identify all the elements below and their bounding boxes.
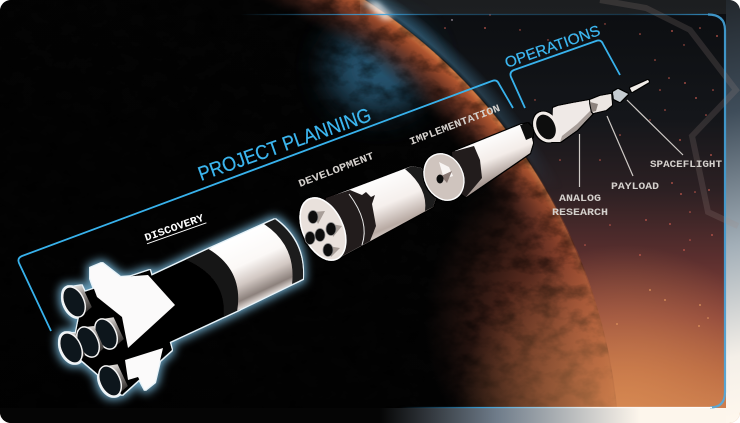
background: bottom horizon glow <box>464 258 726 408</box>
leader line: payload <box>607 116 633 176</box>
lower fin <box>125 348 163 390</box>
frame: bottom line <box>400 406 712 408</box>
engine nozzle 4 <box>94 317 124 350</box>
frame: outer rim bottom <box>0 408 726 423</box>
third stage body <box>455 124 533 197</box>
label: analog research: ANALOG <box>559 193 601 205</box>
large fin <box>90 263 175 348</box>
rocket stage: analog research module <box>530 100 593 145</box>
rocket stage: development section <box>299 166 436 261</box>
heading: project planning: PROJECT PLANNING <box>195 104 374 186</box>
label: implementation: IMPLEMENTATION <box>408 103 502 149</box>
third stage open face <box>417 147 471 207</box>
label: development: DEVELOPMENT <box>297 151 376 191</box>
background: hexagon outline <box>600 0 738 226</box>
module shadow <box>560 109 593 142</box>
second stage band line <box>349 194 364 245</box>
label: discovery: DISCOVERY <box>143 213 206 245</box>
background: planet atmosphere glow <box>366 0 541 172</box>
rocket stage: spaceflight tip <box>630 80 649 92</box>
leader line: analog research <box>578 134 580 187</box>
heading: operations: OPERATIONS <box>503 22 603 72</box>
first stage base mass <box>72 270 172 395</box>
module mouth <box>530 109 562 145</box>
third stage rear collar <box>520 123 533 140</box>
second stage body <box>330 166 436 259</box>
second stage rear cap <box>405 166 436 211</box>
engine nozzle 1 <box>58 282 93 321</box>
label: analog research <box>552 193 608 219</box>
frame: outer rim right <box>726 0 740 423</box>
third stage dark band <box>452 146 482 197</box>
label: analog research: RESEARCH <box>552 207 608 219</box>
rocket stage: first stage with engines and fins <box>55 214 312 400</box>
first stage body <box>130 214 312 347</box>
frame: right edge band <box>708 14 725 408</box>
engine nozzle 3 <box>76 326 104 358</box>
background: stars <box>444 14 718 327</box>
engine nozzle 5 <box>94 361 129 400</box>
leader line: spaceflight <box>627 100 683 155</box>
frame: top blue line <box>240 14 708 16</box>
module body <box>552 100 593 142</box>
second stage dark band <box>326 190 376 257</box>
label: spaceflight: SPACEFLIGHT <box>650 159 722 171</box>
rocket stage: payload module <box>590 94 612 113</box>
engine nozzle 2 <box>55 329 87 367</box>
label: payload: PAYLOAD <box>611 181 659 193</box>
rocket stage: capsule <box>613 89 628 102</box>
rocket stage: implementation section <box>417 123 533 207</box>
bracket: project planning <box>18 80 513 331</box>
bracket: operations <box>510 40 620 108</box>
frame: outer rim top <box>360 0 740 14</box>
second stage nozzle face <box>299 197 347 261</box>
